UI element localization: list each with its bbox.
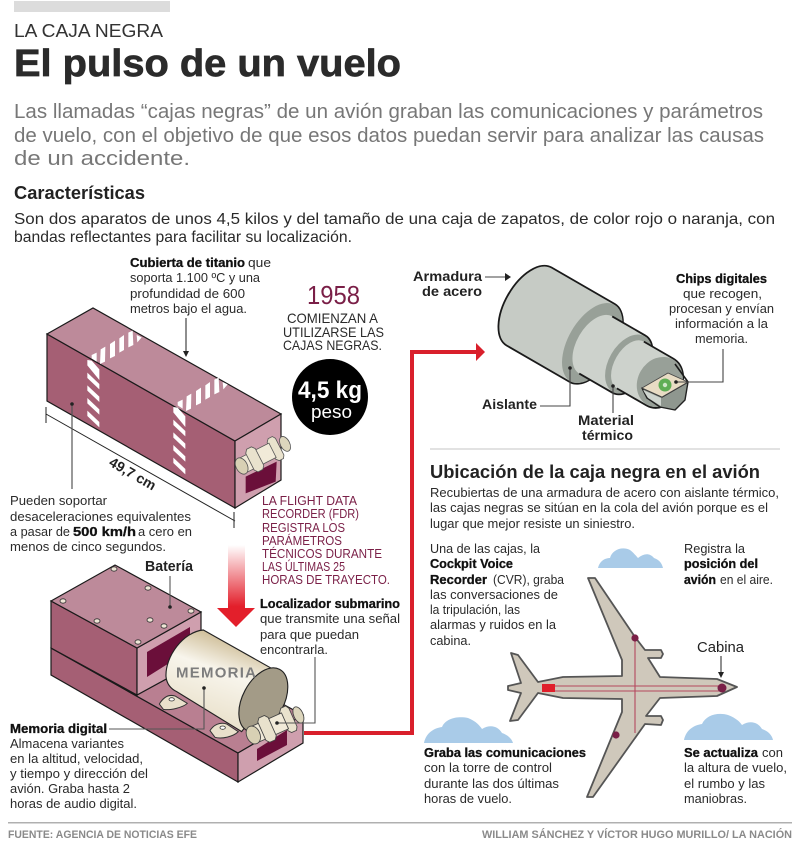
text: cockpit voice recorder: Una de las cajas, la (430, 541, 541, 556)
location text: lugar que mejor resiste un siniestro. (430, 516, 635, 531)
label: thermal material: Material (578, 412, 634, 428)
label: titanium cover: soporta 1.100 ºC y una (130, 270, 261, 285)
memory cylinder (159, 630, 308, 750)
text: communications: Graba las comunicaciones (424, 745, 586, 760)
FDR note: TÉCNICOS DURANTE (262, 546, 382, 561)
text: cockpit voice recorder: Cockpit Voice (430, 556, 513, 571)
text: communications: con la torre de control (424, 760, 552, 775)
label: digital chips: Chips digitales (676, 271, 767, 286)
label: thermal material (578, 412, 634, 443)
FDR note: LAS ÚLTIMAS 25 (262, 559, 345, 574)
gradient arrow down (217, 545, 255, 627)
label: digital chips (669, 271, 774, 346)
leader arrow: cockpit (718, 656, 724, 678)
label: locator: encontrarla. (260, 642, 328, 657)
label: digital chips: memoria. (695, 331, 748, 346)
characteristics text (14, 211, 775, 246)
label: thermal material: térmico (582, 427, 633, 443)
label: battery: Batería (145, 558, 194, 575)
deceleration text (10, 493, 192, 554)
text: communications (424, 745, 586, 806)
deceleration text: menos de cinco segundos. (10, 539, 166, 554)
label: titanium cover: que (248, 255, 271, 270)
deceleration text: a pasar de (10, 524, 70, 539)
year caption: CAJAS NEGRAS. (283, 337, 382, 353)
text: updates (684, 745, 787, 806)
label: insulator: Aislante (482, 396, 537, 412)
label: digital memory: Memoria digital (10, 721, 107, 736)
dimension: length (46, 407, 235, 528)
weight badge: peso (311, 402, 352, 422)
heading: características: Características (14, 183, 145, 203)
airplane (508, 578, 737, 797)
year caption (283, 310, 384, 353)
leader arrow: titanium cover (183, 318, 189, 357)
label: digital memory: Almacena variantes (10, 736, 124, 751)
text: updates: maniobras. (684, 791, 747, 806)
FDR note: REGISTRA LOS (262, 520, 345, 535)
text: position: Registra la (684, 541, 746, 556)
text: communications: horas de vuelo. (424, 791, 512, 806)
weight badge: 4,5 kg (298, 377, 362, 404)
label: titanium cover (130, 255, 271, 316)
year caption: UTILIZARSE LAS (283, 324, 384, 340)
intro text (14, 101, 764, 170)
year caption: COMIENZAN A (287, 310, 379, 326)
dimension: length: 49,7 cm (106, 454, 159, 493)
text: cockpit voice recorder: Recorder (430, 572, 487, 587)
label: titanium cover: Cubierta de titanio (130, 255, 245, 270)
label: steel armor (413, 268, 482, 299)
deceleration text: a cero en (138, 524, 192, 539)
text: updates: Se actualiza (684, 745, 759, 760)
label: cockpit: Cabina (697, 639, 745, 656)
characteristics text: Son dos aparatos de unos 4,5 kilos y del tamaño de una caja de zapatos, de color rojo o naranja, con (14, 211, 775, 228)
text: position: en el aire. (720, 572, 773, 587)
text: cockpit voice recorder (430, 541, 565, 648)
text: position: avión (684, 572, 716, 587)
intro text: de un accidente. (14, 148, 190, 170)
text: cockpit voice recorder: (CVR), graba (493, 572, 565, 587)
label: locator: que transmite una señal (260, 611, 400, 626)
text: cockpit voice recorder: la tripulación, las (430, 602, 520, 617)
location text: las cajas negras se sitúan en la cola del avión porque es el (430, 500, 768, 515)
label: locator: para que puedan (260, 627, 359, 642)
label: locator (260, 596, 400, 657)
internal device: base and battery (51, 565, 303, 782)
text: cockpit voice recorder: alarmas y ruidos en la (430, 617, 557, 632)
label: locator: Localizador submarino (260, 596, 400, 611)
leaders: cylinder labels (485, 273, 723, 413)
text: updates: el rumbo y las (684, 776, 765, 791)
FDR note: PARÁMETROS (262, 533, 342, 548)
leaders: battery, memory, locator (109, 576, 315, 729)
location text: Recubiertas de una armadura de acero con aislante térmico, (430, 485, 779, 500)
label: digital chips: que recogen, (683, 286, 762, 301)
label: digital memory (10, 721, 148, 811)
deceleration text: desaceleraciones equivalentes (10, 509, 191, 524)
label: digital memory: y tiempo y dirección del (10, 766, 148, 781)
heading: location: Ubicación de la caja negra en el avión (430, 462, 760, 482)
source credit: FUENTE: AGENCIA DE NOTICIAS EFE (8, 829, 197, 841)
label: titanium cover: profundidad de 600 (130, 286, 245, 301)
text: position: posición del (684, 556, 758, 571)
leader: deceleration (70, 402, 74, 489)
deceleration text: Pueden soportar (10, 493, 108, 508)
kicker: LA CAJA NEGRA (14, 21, 163, 41)
label: digital memory: avión. Graba hasta 2 (10, 781, 130, 796)
label: digital chips: información a la (675, 316, 769, 331)
FDR note: RECORDER (FDR) (262, 506, 359, 521)
text: cockpit voice recorder: cabina. (430, 633, 471, 648)
FDR note (262, 493, 390, 587)
title: El pulso de un vuelo (14, 43, 401, 85)
FDR note: HORAS DE TRAYECTO. (262, 572, 390, 587)
steel cylinder diagram (486, 256, 701, 432)
label: digital memory: horas de audio digital. (10, 796, 137, 811)
intro text: de vuelo, con el objetivo de que esos datos puedan servir para analizar las causas (14, 125, 764, 147)
label: steel armor: Armadura (413, 268, 482, 284)
text: cockpit voice recorder: las conversaciones de (430, 587, 558, 602)
memory cylinder: MEMORIA (176, 664, 256, 681)
text: communications: durante las dos últimas (424, 776, 559, 791)
deceleration text: 500 km/h (73, 524, 136, 539)
author credit: WILLIAM SÁNCHEZ Y VÍCTOR HUGO MURILLO/ LA NACIÓN (482, 828, 792, 841)
intro text: Las llamadas “cajas negras” de un avión graban las comunicaciones y parámetros (14, 101, 763, 123)
label: digital chips: procesan y envían (669, 301, 774, 316)
text: updates: con (762, 745, 783, 760)
text: updates: la altura de vuelo, (684, 760, 787, 775)
location text (430, 485, 779, 531)
clouds (424, 548, 773, 743)
flight data recorder box (47, 308, 281, 508)
digital chip (642, 364, 688, 410)
connector bolt on recorder (231, 431, 295, 493)
text: position (684, 541, 773, 587)
FDR note: LA FLIGHT DATA (262, 493, 357, 508)
characteristics text: bandas reflectantes para facilitar su localización. (14, 229, 352, 246)
year 1958: 1958 (307, 280, 360, 310)
label: digital memory: en la altitud, velocidad, (10, 751, 143, 766)
weight badge (292, 359, 368, 435)
red connector arrow (304, 343, 485, 733)
label: steel armor: de acero (422, 283, 482, 299)
label: titanium cover: metros bajo el agua. (130, 301, 247, 316)
